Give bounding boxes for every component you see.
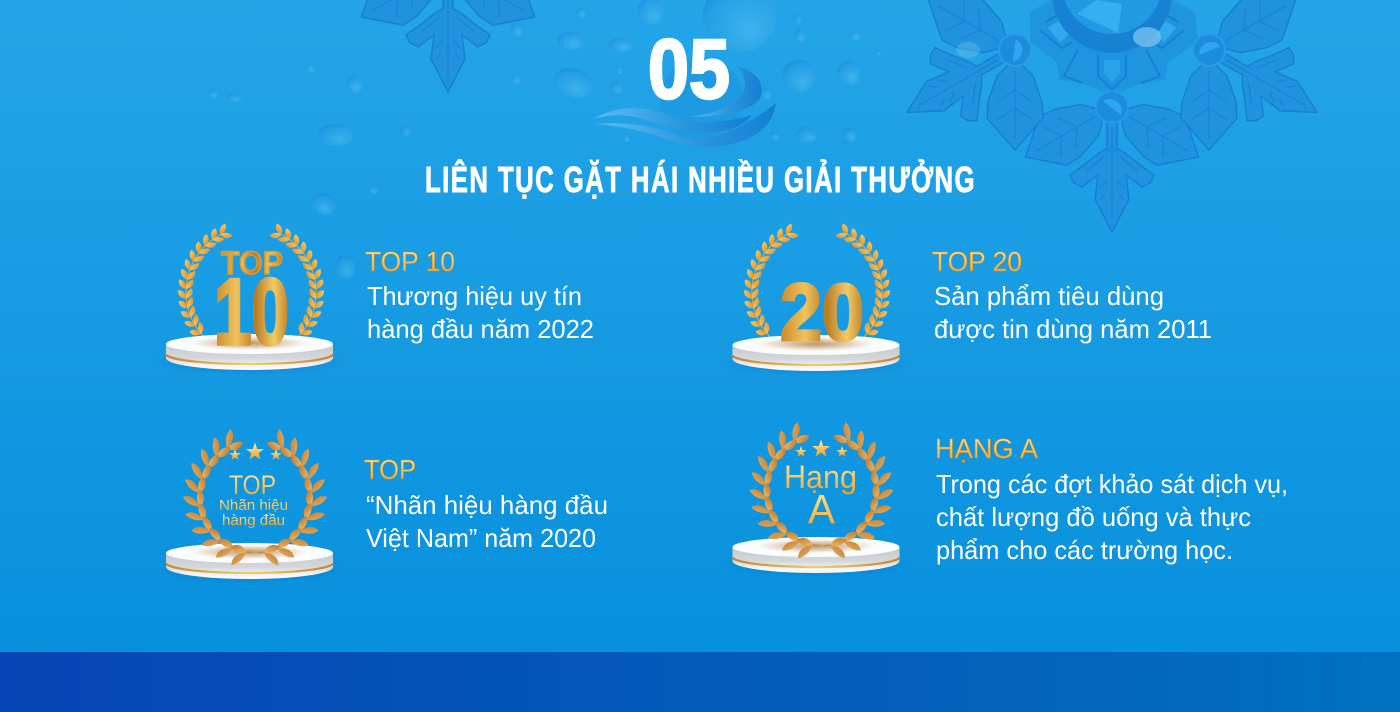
award: top 20 text: Sản phẩm tiêu dùng (934, 281, 1164, 311)
award: top 10 badge (152, 223, 348, 375)
award: grade A text: HẠNG A (935, 433, 1038, 464)
award: top 10 badge: 10 (214, 259, 289, 364)
award: grade A badge: A (808, 486, 836, 532)
award: top 20 text: TOP 20 (932, 246, 1022, 277)
award: grade A badge: Hạng (784, 459, 857, 495)
award: brand badge (152, 427, 348, 584)
award: top 10 text: hàng đầu năm 2022 (367, 314, 594, 344)
award: top 10 text: Thương hiệu uy tín (367, 281, 582, 311)
award: top 10 badge: TOP (221, 245, 283, 281)
title: LIÊN TỤC GẶT HÁI NHIỀU GIẢI THƯỞNG (425, 158, 976, 200)
award: top 10 text: TOP 10 (365, 246, 455, 277)
award: brand badge: hàng đầu (222, 512, 285, 529)
wave swirl behind number (593, 58, 776, 147)
section number: 05 (648, 22, 730, 116)
award: brand badge: TOP (229, 470, 276, 500)
award: top 20 text: được tin dùng năm 2011 (934, 314, 1212, 344)
award: brand badge: Nhãn hiệu (219, 497, 288, 514)
award: brand text: “Nhãn hiệu hàng đầu (366, 490, 608, 520)
award: grade A text (935, 433, 1288, 565)
award: top 10 text (365, 246, 594, 344)
award: grade A text: Trong các đợt khảo sát dịch vụ, (936, 469, 1288, 499)
footer band (0, 652, 1400, 712)
award: brand text: Việt Nam” năm 2020 (366, 523, 596, 553)
award: top 20 text (932, 246, 1212, 344)
award: top 20 badge (718, 223, 914, 376)
award: brand text: TOP (364, 454, 416, 485)
award: grade A text: phẩm cho các trường học. (936, 535, 1233, 565)
snowflake: large top right (856, 0, 1368, 232)
award: grade A badge (718, 420, 914, 578)
water droplets (208, 0, 881, 279)
award: top 20 badge: 20 (780, 268, 864, 358)
award: grade A text: chất lượng đồ uống và thực (936, 502, 1251, 532)
snowflake: small top (347, 0, 549, 92)
award: brand text (364, 454, 608, 553)
